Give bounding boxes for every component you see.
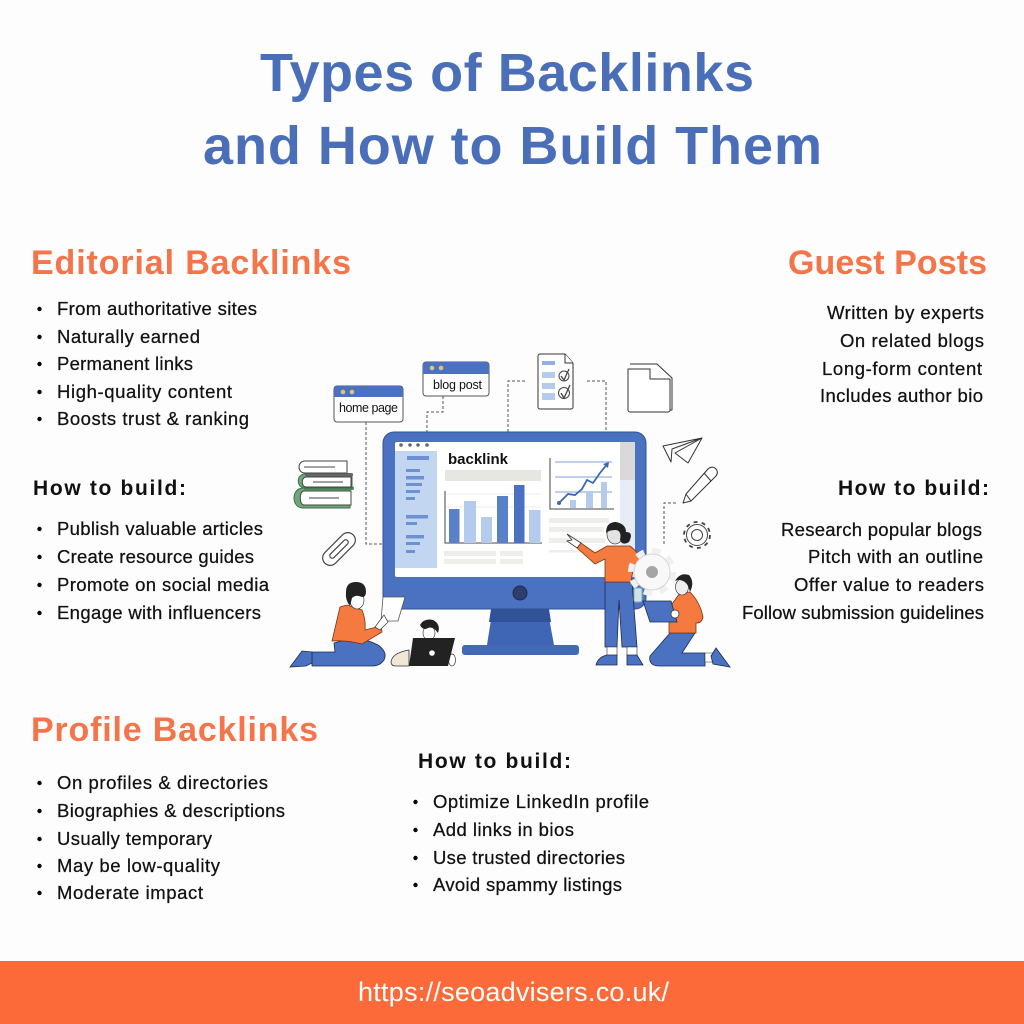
window dots — [399, 443, 429, 447]
footer band — [0, 961, 1024, 1024]
list: editorial features: Permanent links — [57, 353, 193, 374]
figure: seated person with laptop — [391, 620, 456, 666]
list: profile how to build: Use trusted directories — [433, 847, 625, 868]
list: profile features: Usually temporary — [57, 828, 213, 849]
title: Types of Backlinks — [260, 43, 754, 103]
illustration: monitor and team — [290, 354, 730, 667]
sidebar — [395, 451, 437, 568]
list: guest post features: Written by experts — [827, 302, 984, 323]
list: editorial how to build: Create resource guides — [57, 546, 254, 567]
list: profile how to build: Optimize LinkedIn profile — [433, 791, 649, 812]
list: guest post how to build — [742, 519, 984, 623]
icon: blog post window: blog post — [433, 378, 483, 392]
list: editorial features: Naturally earned — [57, 326, 200, 347]
list: editorial features — [37, 298, 257, 429]
bar chart — [445, 485, 542, 543]
list: editorial how to build — [37, 518, 270, 623]
list: profile features: May be low-quality — [57, 855, 221, 876]
list: guest post features: On related blogs — [840, 330, 984, 351]
list: editorial how to build: Publish valuable articles — [57, 518, 263, 539]
list: editorial how to build: Promote on social media — [57, 574, 270, 595]
heading: guest posts: Guest Posts — [788, 244, 987, 282]
list: guest post how to build: Pitch with an outline — [808, 546, 983, 567]
figure: kneeling woman with tablet — [643, 574, 730, 667]
figure: seated man with tablet — [290, 582, 405, 667]
icon: stack of books — [294, 461, 354, 508]
icon: paper plane — [663, 438, 702, 463]
icon: monitor — [383, 432, 646, 655]
list: editorial features: High-quality content — [57, 381, 232, 402]
figure: standing woman presenting — [567, 522, 643, 665]
panel: profile backlinks — [31, 711, 318, 903]
heading: editorial backlinks: Editorial Backlinks — [31, 244, 351, 282]
list: profile features: Biographies & descriptions — [57, 800, 285, 821]
list: guest post features: Long-form content — [822, 358, 982, 379]
panel: editorial backlinks — [31, 244, 351, 623]
title — [203, 43, 822, 176]
list: editorial how to build: Engage with influencers — [57, 602, 261, 623]
list: guest post how to build: Offer value to readers — [794, 574, 984, 595]
subheading: how to build: How to build: — [33, 477, 186, 500]
heading: profile backlinks: Profile Backlinks — [31, 711, 318, 749]
icon: pencil — [683, 467, 717, 503]
list: guest post how to build: Research popular blogs — [781, 519, 982, 540]
list: profile features: On profiles & directories — [57, 772, 268, 793]
subheading: how to build: How to build: — [838, 477, 989, 500]
list: profile features — [37, 772, 285, 903]
list: profile features: Moderate impact — [57, 882, 203, 903]
icon: home page window — [334, 386, 403, 422]
icon: checklist document — [538, 354, 573, 409]
icon: large white gear — [631, 551, 673, 602]
icon: blog post window — [423, 362, 489, 396]
icon: home page window: home page — [339, 401, 398, 415]
panel: guest posts — [742, 244, 989, 623]
list: editorial features: From authoritative sites — [57, 298, 257, 319]
connector lines — [366, 381, 678, 544]
list: profile how to build: Avoid spammy listings — [433, 874, 622, 895]
footer url: https://seoadvisers.co.uk/ — [358, 977, 669, 1007]
list: editorial features: Boosts trust & ranking — [57, 408, 249, 429]
list: guest post how to build: Follow submission guidelines — [742, 602, 984, 623]
icon: folder — [628, 364, 672, 412]
icon: paper clip — [320, 530, 358, 568]
list: profile how to build: Add links in bios — [433, 819, 574, 840]
title: and How to Build Them — [203, 116, 822, 176]
line chart — [550, 458, 614, 509]
panel: profile how to build — [413, 750, 649, 895]
icon: settings gear — [684, 522, 710, 548]
list: guest post features — [820, 302, 984, 406]
subheading: how to build: How to build: — [418, 750, 571, 773]
screen heading: backlink — [448, 451, 509, 468]
list: guest post features: Includes author bio — [820, 385, 983, 406]
list: profile how to build — [413, 791, 649, 895]
